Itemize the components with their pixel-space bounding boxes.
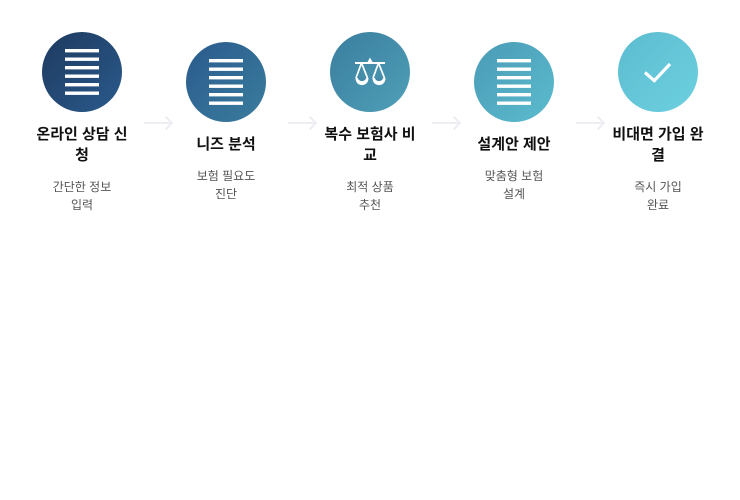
description: 설계	[503, 187, 525, 201]
heading: 설계안 제안	[477, 136, 551, 153]
arrow 1	[144, 116, 173, 130]
description	[634, 180, 682, 212]
heading: 온라인 상담 신	[36, 126, 128, 143]
description	[346, 180, 394, 212]
description: 최적 상품	[346, 180, 394, 194]
step 1: online consultation	[36, 32, 128, 212]
icon: list lines on teal circle	[474, 42, 554, 122]
step 3: multi-insurer comparison	[324, 32, 416, 212]
description	[485, 169, 543, 201]
process flow	[36, 32, 704, 212]
heading	[612, 126, 704, 164]
description	[197, 169, 255, 201]
description: 완료	[647, 198, 669, 212]
description: 맞춤형 보험	[485, 169, 543, 183]
arrow 2	[288, 116, 317, 130]
heading: 복수 보험사 비	[324, 126, 416, 143]
arrow 3	[432, 116, 461, 130]
heading: 청	[75, 147, 89, 164]
heading: 비대면 가입 완	[612, 126, 704, 143]
heading: 니즈 분석	[196, 136, 256, 153]
description	[53, 180, 111, 212]
step 5: contactless sign-up complete	[612, 32, 704, 212]
heading: 결	[651, 147, 665, 164]
heading	[324, 126, 416, 164]
icon: list lines on blue circle	[186, 42, 266, 122]
description: 즉시 가입	[634, 180, 682, 194]
step 4: proposal	[474, 42, 554, 201]
icon: list lines on dark navy circle	[42, 32, 122, 112]
description: 보험 필요도	[197, 169, 255, 183]
description: 추천	[359, 198, 381, 212]
step 2: needs analysis	[186, 42, 266, 201]
icon: check mark on light teal circle	[618, 32, 698, 112]
description: 진단	[215, 187, 237, 201]
description: 입력	[71, 198, 93, 212]
heading	[36, 126, 128, 164]
description: 간단한 정보	[53, 180, 111, 194]
heading: 교	[363, 147, 377, 164]
arrow 4	[576, 116, 605, 130]
icon: balance scale on teal-blue circle	[330, 32, 410, 112]
